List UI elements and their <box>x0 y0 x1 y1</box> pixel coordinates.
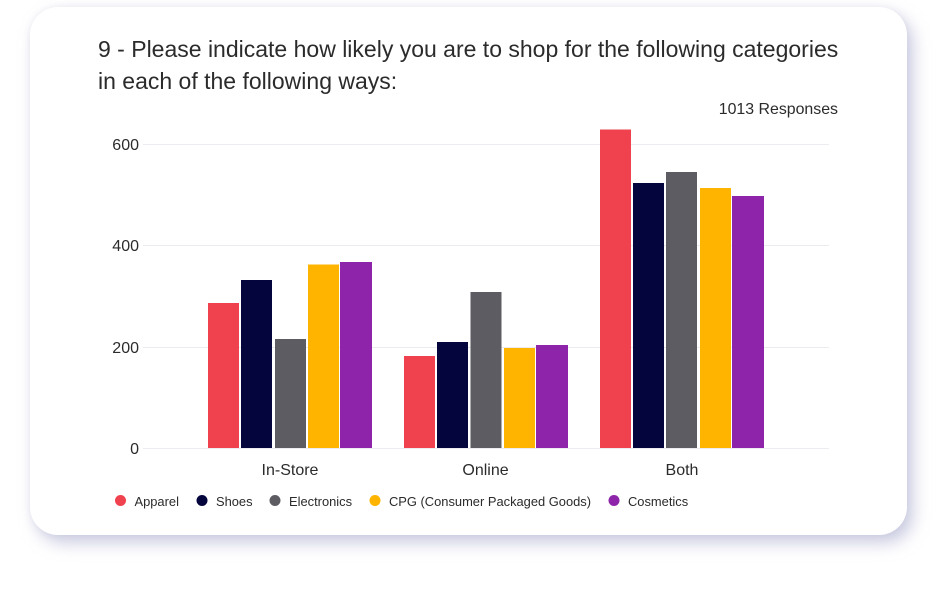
legend: Cosmetics <box>628 494 688 509</box>
y axis and gridlines: 600 <box>112 137 139 154</box>
legend: CPG (Consumer Packaged Goods) <box>389 494 591 509</box>
bars: In-Store <box>208 262 372 448</box>
x axis labels <box>262 462 698 479</box>
y axis and gridlines: 200 <box>112 340 139 357</box>
legend: Apparel <box>134 494 179 509</box>
x axis labels: Both <box>666 462 698 479</box>
legend <box>115 494 688 509</box>
x axis labels: Online <box>462 462 509 479</box>
y axis and gridlines: 400 <box>112 238 139 255</box>
legend: Electronics <box>289 494 352 509</box>
response count: 1013 Responses <box>719 101 838 118</box>
title: 9 - Please indicate how likely you are to shop for the following categories <box>98 36 838 62</box>
title: in each of the following ways: <box>98 68 397 94</box>
x axis labels: In-Store <box>262 462 319 479</box>
legend: Shoes <box>216 494 253 509</box>
bars: Both <box>600 130 764 448</box>
y axis and gridlines <box>112 137 829 458</box>
title <box>98 36 838 94</box>
y axis and gridlines: 0 <box>130 441 139 458</box>
bars: Online <box>404 292 568 448</box>
